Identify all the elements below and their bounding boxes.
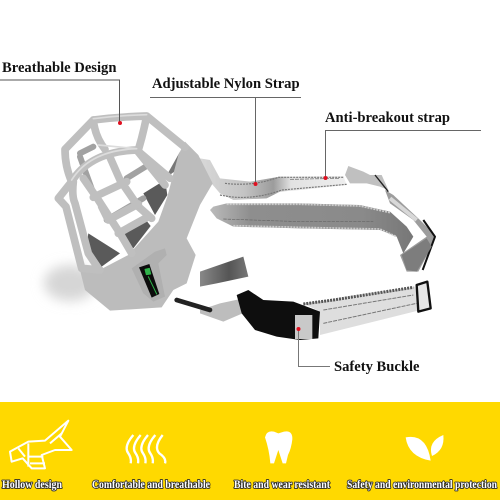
muzzle: cage bars — [58, 116, 185, 270]
strap: lower dark loop — [200, 257, 248, 287]
strap: muzzle to buckle — [200, 298, 247, 322]
callout: Anti-breakout strap — [324, 110, 481, 180]
caption: Comfortable and breathable: Comfortable and breathable — [92, 479, 210, 491]
anti-breakout strap — [200, 158, 347, 200]
callout: Breathable Design: Breathable Design — [2, 60, 116, 76]
strap: metal slider — [345, 166, 388, 190]
muzzle: bar highlights — [72, 115, 147, 180]
straps — [200, 158, 435, 340]
buckle: strap window — [295, 315, 312, 339]
shadow under muzzle — [44, 265, 96, 301]
icon: leaves — [406, 435, 444, 461]
callout: Adjustable Nylon Strap: Adjustable Nylon Strap — [152, 76, 300, 92]
callout: Safety Buckle: Safety Buckle — [334, 359, 420, 375]
icon: tooth — [265, 431, 292, 463]
strap: middle nylon — [210, 203, 413, 253]
strap: side loop — [402, 238, 432, 272]
callout: Breathable Design — [0, 60, 122, 125]
strap: black edge — [423, 220, 435, 270]
muzzle: strap stub — [177, 300, 210, 310]
buckle: black clip — [237, 290, 320, 340]
callout: Safety Buckle — [296, 327, 420, 375]
strap: slider edge — [375, 175, 388, 192]
icon: breathable waves — [127, 435, 165, 463]
icon: muzzle outline — [10, 421, 72, 468]
strap: side connector — [385, 190, 435, 272]
strap: side connector highlight — [390, 198, 417, 220]
strap: lower adjustable — [303, 287, 421, 335]
muzzle: tag — [132, 248, 167, 302]
muzzle — [58, 115, 213, 311]
callout: Adjustable Nylon Strap — [150, 76, 301, 186]
callout: Anti-breakout strap: Anti-breakout strap — [325, 110, 450, 126]
yellow footer band — [0, 402, 500, 500]
caption: Hollow design: Hollow design — [2, 479, 63, 491]
caption: Bite and wear resistant: Bite and wear resistant — [234, 479, 330, 491]
strap: adjuster slider — [417, 282, 431, 312]
muzzle: inner pad — [87, 152, 180, 267]
muzzle: silicone band — [80, 142, 213, 311]
muzzle: back bars — [80, 147, 147, 220]
